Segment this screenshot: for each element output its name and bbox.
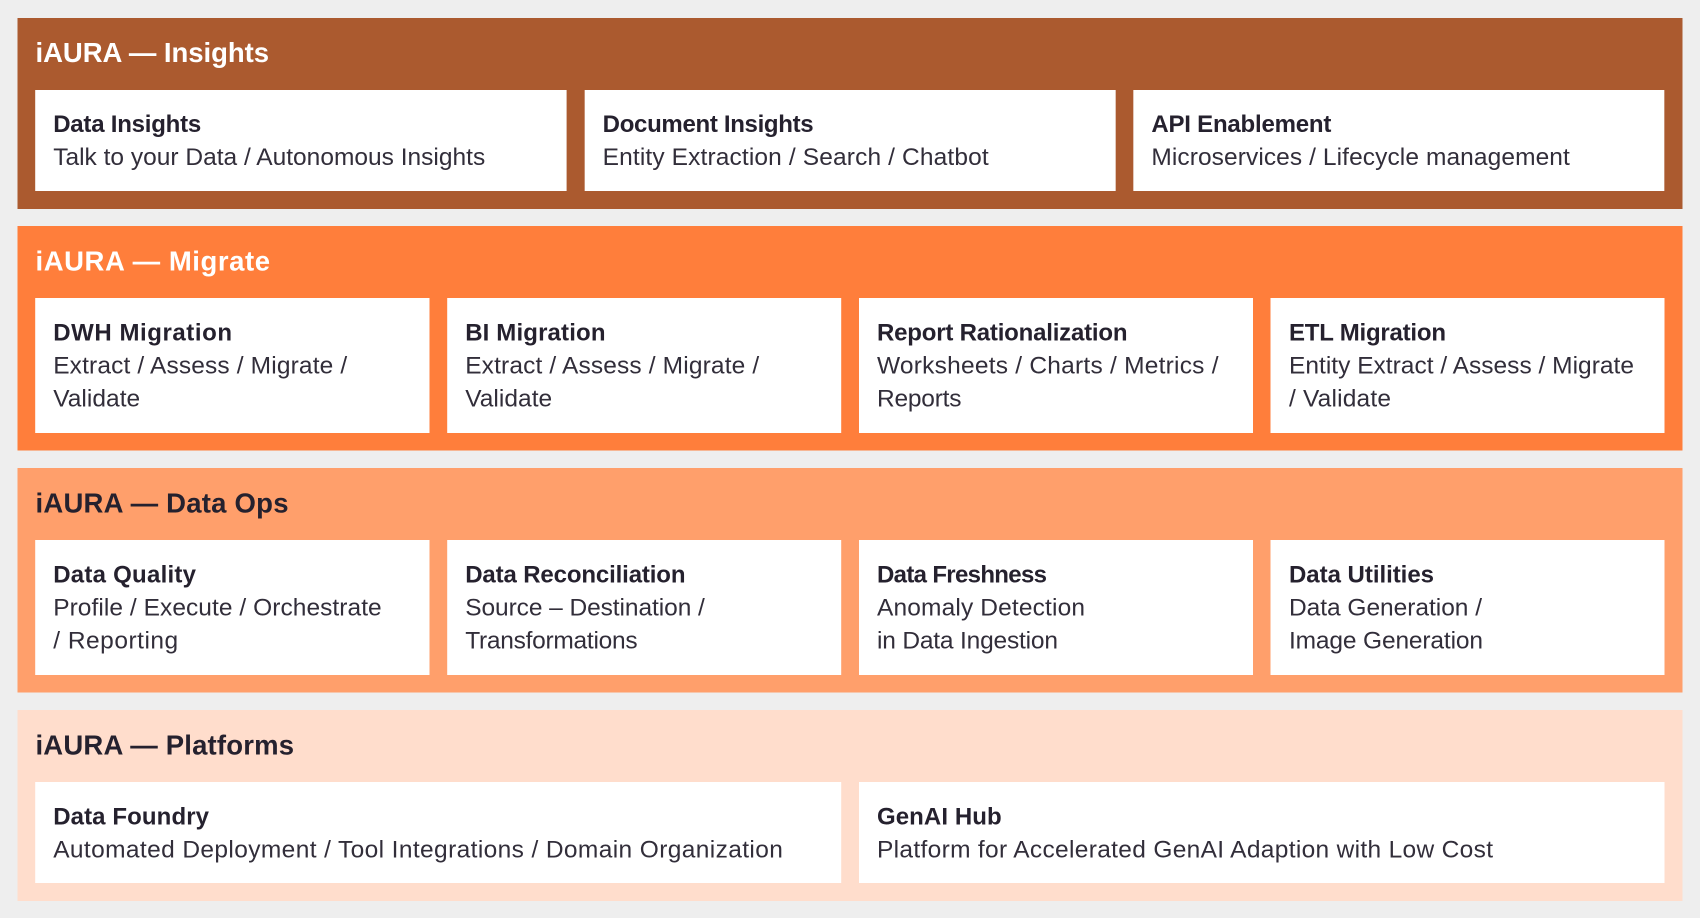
card: Document Insights: Entity Extraction / Search / Chatbot xyxy=(603,144,989,171)
card: Report Rationalization xyxy=(859,298,1253,433)
card: Document Insights: Document Insights xyxy=(603,111,814,138)
card: BI Migration: Extract / Assess / Migrate / xyxy=(465,352,759,379)
card: Data Quality xyxy=(35,540,429,675)
card: Data Reconciliation: Transformations xyxy=(465,628,638,654)
card: API Enablement: API Enablement xyxy=(1151,111,1331,138)
card: Data Freshness: in Data Ingestion xyxy=(877,628,1058,654)
card: Data Foundry xyxy=(35,782,841,883)
card: Data Foundry: Automated Deployment / Tool Integrations / Domain Organization xyxy=(53,836,783,863)
panel: iAURA Data Ops xyxy=(18,468,1682,692)
heading: iAURA Platforms: iAURA — Platforms xyxy=(36,729,294,760)
card: ETL Migration xyxy=(1270,298,1664,433)
heading: iAURA Data Ops: iAURA — Data Ops xyxy=(36,487,288,518)
card: API Enablement: Microservices / Lifecycle management xyxy=(1151,144,1570,171)
card: Data Utilities: Image Generation xyxy=(1289,628,1483,654)
card: DWH Migration: Extract / Assess / Migrate / xyxy=(53,352,347,379)
card: ETL Migration: / Validate xyxy=(1289,386,1391,412)
heading: iAURA Insights: iAURA — Insights xyxy=(36,37,269,68)
card: GenAI Hub: Platform for Accelerated GenAI Adaption with Low Cost xyxy=(877,836,1493,863)
card: DWH Migration: Validate xyxy=(53,386,140,412)
card: Data Reconciliation: Data Reconciliation xyxy=(465,561,686,588)
card: Document Insights xyxy=(585,90,1116,191)
card: Data Utilities xyxy=(1270,540,1664,675)
card: Report Rationalization: Report Rationalization xyxy=(877,319,1128,346)
card: Data Reconciliation xyxy=(447,540,841,675)
card: BI Migration xyxy=(447,298,841,433)
card: Data Quality: Profile / Execute / Orchestrate xyxy=(53,594,382,621)
card: Data Utilities: Data Utilities xyxy=(1289,561,1434,588)
card: Data Foundry: Data Foundry xyxy=(53,803,210,830)
card: Data Freshness: Anomaly Detection xyxy=(877,594,1085,621)
card: Report Rationalization: Reports xyxy=(877,386,962,412)
card: Report Rationalization: Worksheets / Charts / Metrics / xyxy=(877,352,1219,379)
card: Data Reconciliation: Source – Destination / xyxy=(465,594,705,621)
heading: iAURA Migrate: iAURA — Migrate xyxy=(36,246,270,276)
card: BI Migration: BI Migration xyxy=(465,319,606,346)
panel: iAURA Migrate xyxy=(18,226,1682,450)
card: Data Insights xyxy=(35,90,567,191)
panel: iAURA Platforms xyxy=(18,710,1682,901)
card: Data Quality: / Reporting xyxy=(53,628,178,654)
card: GenAI Hub xyxy=(859,782,1664,883)
card: BI Migration: Validate xyxy=(465,386,552,412)
card: ETL Migration: Entity Extract / Assess / Migrate xyxy=(1289,352,1634,379)
card: Data Freshness xyxy=(859,540,1253,675)
card: Data Freshness: Data Freshness xyxy=(877,561,1047,588)
panel: iAURA Insights xyxy=(18,18,1682,209)
card: Data Quality: Data Quality xyxy=(53,561,197,588)
card: API Enablement xyxy=(1133,90,1664,191)
card: DWH Migration xyxy=(35,298,429,433)
card: DWH Migration: DWH Migration xyxy=(53,319,232,346)
card: Data Utilities: Data Generation / xyxy=(1289,594,1482,621)
card: ETL Migration: ETL Migration xyxy=(1289,319,1446,346)
card: Data Insights: Talk to your Data / Autonomous Insights xyxy=(53,144,485,171)
card: GenAI Hub: GenAI Hub xyxy=(877,803,1002,830)
card: Data Insights: Data Insights xyxy=(53,111,201,138)
